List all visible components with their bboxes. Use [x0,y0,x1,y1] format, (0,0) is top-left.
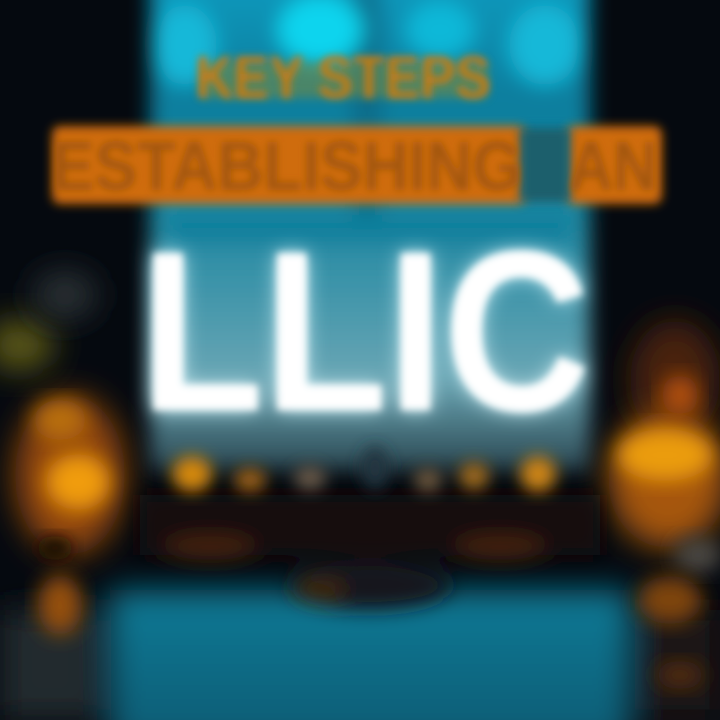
heading line: establishing an: ESTABLISHING [52,127,522,205]
floor: teal table surface [0,590,720,720]
heading line: key steps: KEY STEPS [196,44,490,111]
right lamp glow [608,320,720,689]
heading line: establishing an: AN [569,127,657,205]
title: LLC: LLIC [140,205,590,459]
dark counter band [140,495,600,609]
title: LLC: LLIC [140,205,590,459]
left lamp glow [0,271,125,635]
panel: glowing cyan window [150,0,590,470]
row of small orange lights [172,446,556,492]
